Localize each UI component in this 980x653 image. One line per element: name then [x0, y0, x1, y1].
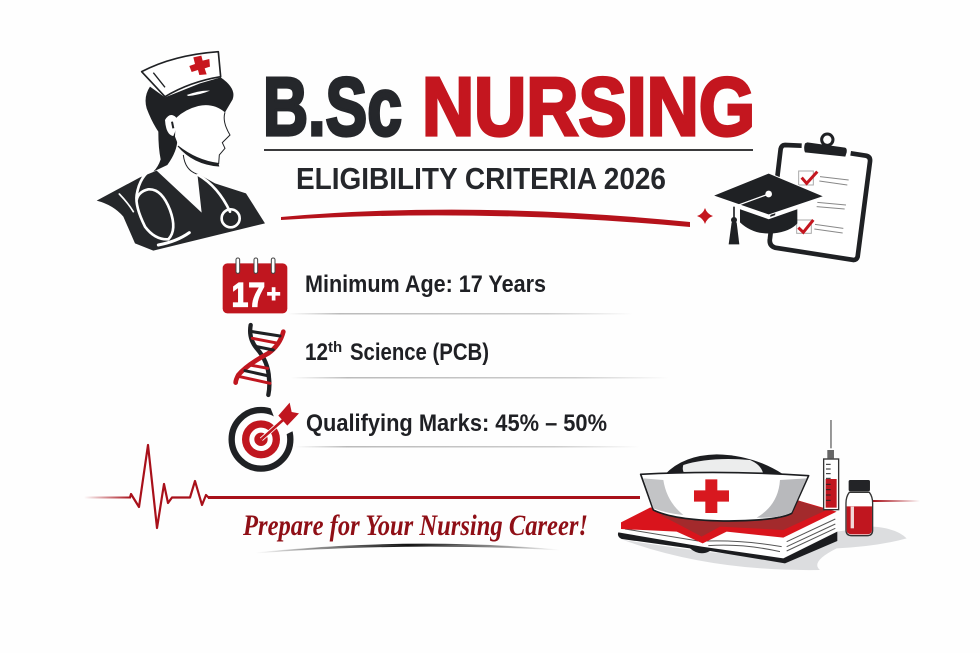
list item: science [236, 325, 669, 395]
title: B.Sc NURSING: B.Sc [263, 60, 402, 153]
red cross [694, 479, 729, 513]
text: 12th science: Science (PCB) [350, 339, 489, 366]
ground shadow [623, 527, 907, 570]
tagline underline swoosh [255, 544, 560, 553]
list item: minimum age [223, 258, 633, 315]
title: B.Sc NURSING [263, 60, 755, 153]
nurse cap band [641, 472, 809, 521]
book base [618, 532, 837, 563]
subtitle: ELIGIBILITY CRITERIA 2026 [296, 161, 666, 196]
red swoosh [281, 210, 690, 227]
red cross [189, 56, 210, 75]
vial [849, 480, 870, 491]
book pages [623, 515, 837, 555]
face profile line [219, 112, 230, 164]
text: 12th science [305, 339, 489, 366]
face [175, 105, 230, 164]
icon: calendar 17+: 17 [232, 277, 265, 315]
nurse cap crown [665, 454, 783, 474]
icon: clipboard and graduation cap [713, 134, 870, 260]
clip [822, 134, 833, 145]
text: 12th science: th [328, 339, 342, 356]
illustration: book, nurse cap, syringe and vial [618, 420, 907, 570]
hair highlight [187, 91, 210, 96]
clipboard board [770, 145, 870, 260]
title: B.Sc NURSING: NURSING [422, 60, 755, 153]
graduation cap [740, 208, 797, 234]
scrubs [97, 171, 265, 251]
ear [165, 115, 177, 136]
list item: qualifying marks [232, 403, 640, 469]
text: minimum age: Minimum Age: 17 Years [305, 271, 546, 298]
heartbeat line [84, 445, 920, 528]
icon: target with arrow [232, 403, 299, 469]
icon: calendar 17+ [223, 258, 287, 315]
hair [146, 77, 233, 172]
title rule [264, 149, 753, 151]
icon: DNA helix [236, 325, 283, 395]
text: qualifying marks: Qualifying Marks: 45% – 50% [306, 410, 607, 437]
syringe [829, 420, 833, 448]
nurse cap [142, 52, 221, 97]
jaw shadow [178, 146, 219, 166]
icon: sparkle [697, 208, 713, 224]
book red cover [621, 500, 837, 543]
stethoscope [119, 168, 240, 245]
icon: nurse bust [97, 52, 265, 251]
icon: calendar 17+: + [267, 281, 281, 308]
checklist [799, 171, 813, 185]
tagline: Prepare for Your Nursing Career! [242, 509, 588, 542]
text: 12th science: 12 [305, 339, 328, 366]
neck line [183, 155, 197, 174]
